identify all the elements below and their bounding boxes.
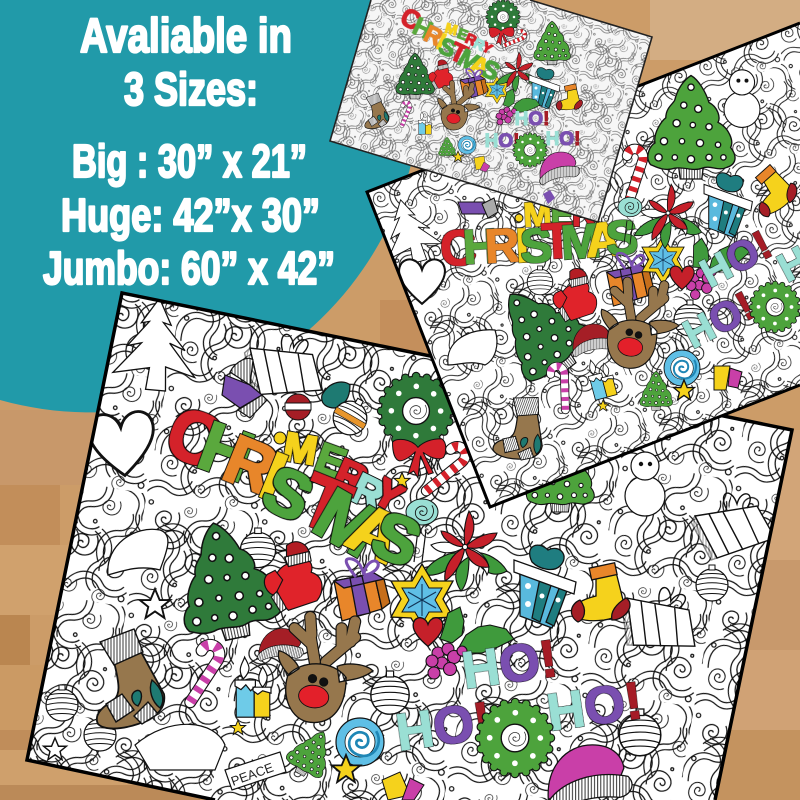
green tree fragment bbox=[526, 470, 595, 512]
christmas lettering: I bbox=[514, 220, 530, 273]
reindeer bbox=[438, 83, 480, 130]
snowflake star bbox=[642, 236, 684, 284]
dark green tree bbox=[183, 522, 280, 642]
holly and berries bbox=[675, 227, 758, 301]
christmas lettering: H bbox=[461, 220, 499, 275]
candles bbox=[235, 657, 271, 717]
merry christmas lettering: T bbox=[289, 457, 362, 551]
red heart bbox=[670, 266, 694, 290]
candles bbox=[584, 356, 618, 400]
snowflake star bbox=[485, 76, 509, 104]
peace banner bbox=[225, 752, 286, 790]
snowflake star bbox=[390, 563, 454, 623]
green wreath bbox=[752, 284, 798, 330]
yellow and pink candle bbox=[382, 772, 424, 800]
christmas lettering bbox=[439, 211, 640, 277]
poster: small, big size bbox=[330, 0, 652, 222]
merry christmas lettering: S bbox=[252, 450, 324, 536]
red mittens bbox=[264, 542, 322, 612]
sizes list: Huge: 42”x 30” bbox=[61, 189, 320, 241]
merry christmas lettering: C bbox=[156, 392, 232, 485]
merry christmas lettering: S bbox=[362, 496, 431, 581]
small poster lettering: H bbox=[408, 12, 436, 45]
purple stocking bbox=[458, 198, 498, 218]
christmas lettering: S bbox=[519, 219, 554, 274]
uncoloured doodles bbox=[44, 295, 775, 770]
HO! three: HO! bbox=[546, 129, 580, 150]
small poster lettering: E bbox=[455, 25, 470, 44]
christmas lettering: C bbox=[439, 219, 478, 277]
magenta candy cane bbox=[190, 643, 221, 706]
orange gift bbox=[334, 559, 390, 621]
red ornament bbox=[285, 394, 311, 420]
poinsettia bbox=[634, 184, 702, 248]
poinsettia bbox=[496, 52, 538, 92]
small poster lettering: M bbox=[443, 20, 459, 39]
dark green tree bbox=[479, 270, 600, 393]
magenta cane bbox=[402, 103, 410, 126]
yellow star bbox=[452, 151, 464, 162]
orange gift bbox=[460, 69, 488, 100]
holly berries bbox=[496, 89, 540, 125]
merry christmas lettering: A bbox=[336, 488, 413, 578]
small poster lettering: A bbox=[465, 50, 493, 83]
red hat bbox=[257, 628, 304, 662]
teal circle panel bbox=[0, 0, 422, 412]
small poster lettering: R bbox=[470, 35, 488, 55]
christmas lettering: M bbox=[559, 215, 603, 270]
small poster lettering bbox=[396, 1, 504, 87]
sizes list: Big : 30” x 21” bbox=[72, 135, 307, 187]
small poster lettering: T bbox=[445, 36, 472, 70]
poster: big, jumbo size bbox=[27, 293, 792, 800]
merry christmas lettering: I bbox=[251, 438, 297, 515]
brown stocking bbox=[365, 93, 389, 129]
light green wreath bbox=[479, 702, 551, 774]
teal bag bbox=[322, 382, 350, 408]
purple piece bbox=[543, 190, 555, 204]
candle bbox=[418, 112, 432, 134]
HO! lettering: HO! bbox=[693, 223, 779, 296]
sizes heading bbox=[80, 10, 292, 115]
lollipop bbox=[406, 499, 438, 562]
blue swirl bbox=[336, 718, 384, 766]
dark tree bbox=[396, 53, 435, 99]
small tree bbox=[438, 137, 456, 158]
merry christmas lettering: R bbox=[344, 464, 392, 520]
HO! lettering one: HO! bbox=[458, 630, 561, 701]
merry christmas lettering: M bbox=[301, 474, 393, 573]
light tree bbox=[534, 21, 571, 65]
pink hat bbox=[540, 152, 580, 185]
dark green wreath bbox=[381, 376, 451, 446]
merry christmas lettering: R bbox=[214, 420, 288, 509]
merry christmas lettering: M bbox=[280, 425, 320, 474]
yellow pink candle bbox=[714, 366, 742, 390]
HO! lettering three: HO! bbox=[543, 672, 646, 743]
merry lettering: M bbox=[522, 195, 553, 235]
small poster lettering: R bbox=[462, 30, 479, 50]
christmas lettering: T bbox=[540, 212, 574, 270]
merry christmas lettering bbox=[168, 408, 421, 566]
small tree bbox=[640, 371, 673, 410]
HO! lettering: HO! bbox=[676, 284, 762, 357]
merry christmas lettering: H bbox=[189, 406, 263, 497]
brown stocking bbox=[97, 629, 164, 728]
red candy cane bbox=[426, 443, 468, 500]
magenta candy cane bbox=[547, 364, 579, 410]
purple stocking bbox=[222, 358, 267, 418]
HO! lettering two: HO! bbox=[392, 692, 495, 763]
yellow star bbox=[674, 380, 694, 400]
holly and berries bbox=[426, 607, 514, 679]
brown stocking bbox=[491, 389, 558, 468]
red mittens bbox=[553, 269, 597, 322]
merry christmas lettering: Y bbox=[367, 471, 409, 520]
bow bbox=[489, 27, 514, 46]
blue gift bbox=[704, 173, 752, 237]
yellow star bbox=[394, 472, 410, 488]
sizes list bbox=[43, 135, 335, 294]
blue swirl bbox=[664, 350, 700, 386]
yellow sock bbox=[742, 159, 800, 219]
green wreath bbox=[514, 134, 546, 166]
light tree bbox=[648, 76, 735, 179]
reindeer bbox=[278, 617, 373, 723]
red heart bbox=[413, 618, 443, 646]
candy cane bbox=[505, 29, 526, 51]
blue gift bbox=[529, 68, 560, 109]
uncoloured doodles bbox=[374, 70, 760, 365]
yellow pink candle bbox=[474, 156, 490, 172]
reindeer bbox=[601, 282, 679, 368]
merry lettering: R bbox=[572, 196, 596, 234]
small poster lettering: Y bbox=[479, 38, 496, 57]
HO! two: HO! bbox=[485, 131, 519, 152]
small yellow star bbox=[230, 720, 246, 734]
mitten bbox=[429, 60, 453, 89]
peace banner: PEACE bbox=[229, 760, 276, 789]
wreath bbox=[488, 2, 518, 32]
sizes heading: Avaliable in bbox=[80, 10, 292, 63]
small poster lettering: C bbox=[396, 1, 426, 36]
HO! one: HO! bbox=[515, 109, 549, 130]
red candy cane bbox=[625, 148, 647, 201]
poster: medium, huge size bbox=[367, 23, 800, 507]
yellow star bbox=[332, 755, 360, 782]
sizes list: Jumbo: 60” x 42” bbox=[43, 242, 335, 294]
blue gift bbox=[514, 545, 576, 628]
small poster lettering: S bbox=[434, 33, 460, 64]
yellow sock bbox=[571, 563, 630, 622]
yellow sock bbox=[556, 84, 583, 110]
small poster lettering: S bbox=[477, 55, 504, 87]
blue swirl bbox=[458, 136, 476, 154]
christmas lettering: A bbox=[584, 213, 622, 268]
small tree bbox=[286, 732, 326, 778]
small poster lettering: R bbox=[420, 20, 447, 52]
small star bbox=[597, 400, 609, 411]
orange gift bbox=[607, 253, 654, 306]
small poster lettering: I bbox=[432, 29, 450, 56]
red hat bbox=[573, 324, 613, 357]
small poster lettering: M bbox=[453, 44, 485, 78]
merry lettering: E bbox=[551, 196, 573, 234]
merry christmas lettering: E bbox=[310, 434, 352, 487]
merry christmas lettering: R bbox=[327, 449, 374, 504]
sizes heading: 3 Sizes: bbox=[124, 63, 258, 115]
poinsettia bbox=[423, 511, 507, 591]
merry lettering bbox=[515, 195, 596, 235]
christmas lettering: R bbox=[483, 219, 521, 274]
lollipop bbox=[618, 197, 642, 244]
orange ornament bbox=[332, 398, 368, 436]
christmas lettering: S bbox=[604, 211, 640, 266]
pink santa hat bbox=[548, 745, 632, 800]
red bow bbox=[392, 439, 446, 478]
